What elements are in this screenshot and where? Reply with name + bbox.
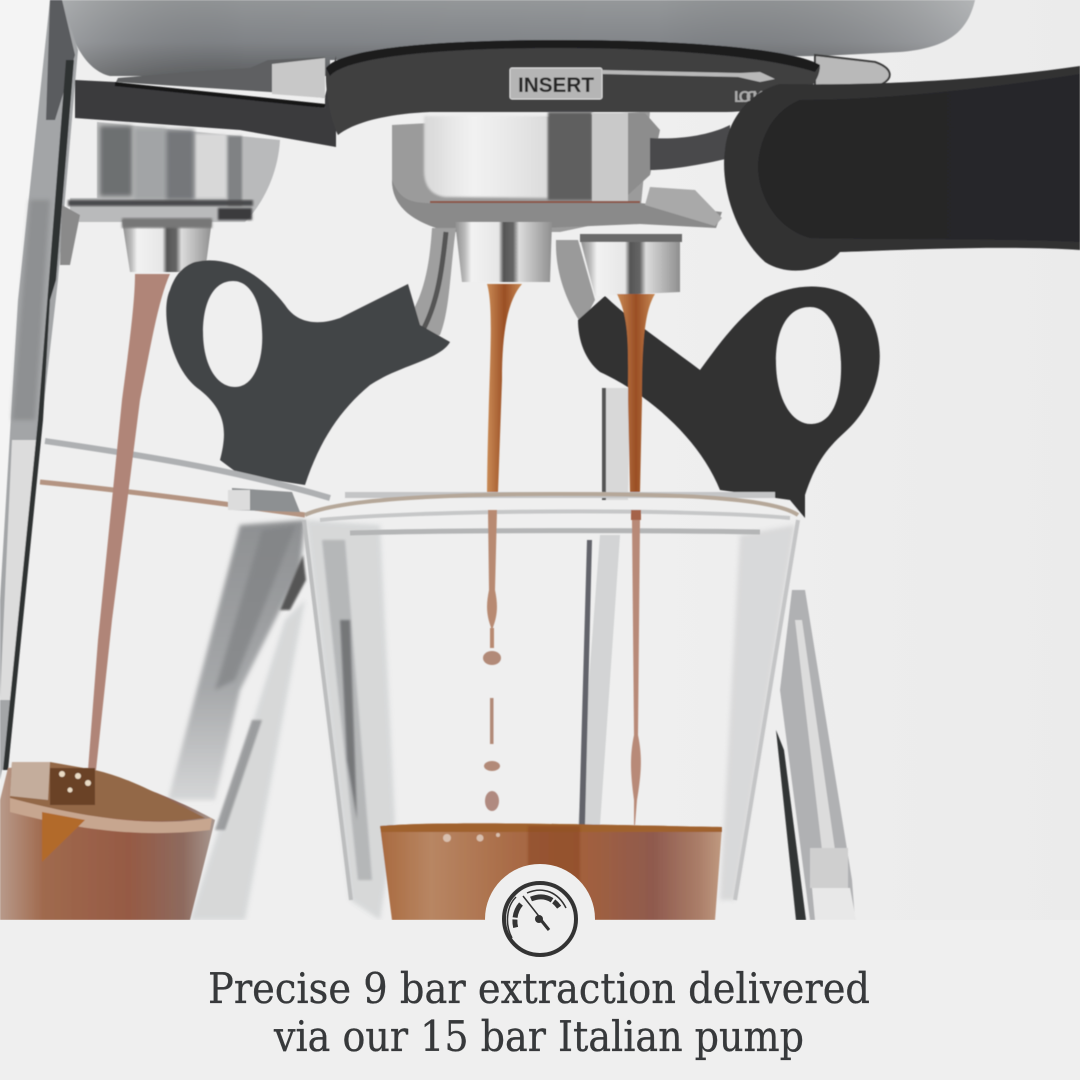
drip rim right — [815, 55, 890, 93]
portafilter handle — [724, 66, 1080, 271]
left stream — [88, 274, 170, 770]
INSERT label: INSERT — [518, 74, 594, 97]
INSERT label — [510, 68, 602, 99]
caption band — [0, 920, 1080, 1080]
left steam loop — [166, 260, 450, 485]
arrow — [602, 70, 775, 82]
centre portafilter basket — [392, 112, 650, 232]
steam wand — [776, 590, 856, 920]
left frame column — [0, 0, 78, 780]
coffee streams — [487, 284, 522, 492]
right steam loop — [578, 286, 880, 518]
centre collar — [326, 40, 820, 135]
icon badge: pressure gauge — [485, 864, 595, 974]
machine body — [62, 0, 975, 76]
caption text — [208, 964, 870, 1061]
caption text: Precise 9 bar extraction delivered — [208, 964, 870, 1013]
LOCK label: LOCK — [734, 89, 764, 106]
left coffee — [0, 762, 215, 920]
chrome tube behind glass — [602, 388, 630, 500]
left spout — [122, 220, 212, 272]
left group chrome — [70, 122, 280, 222]
centre coffee — [380, 823, 722, 920]
caption text: via our 15 bar Italian pump — [273, 1012, 804, 1061]
left dark plate — [75, 56, 336, 147]
centre glass — [304, 492, 798, 920]
left glass — [40, 441, 330, 920]
centre spouts — [455, 222, 552, 282]
